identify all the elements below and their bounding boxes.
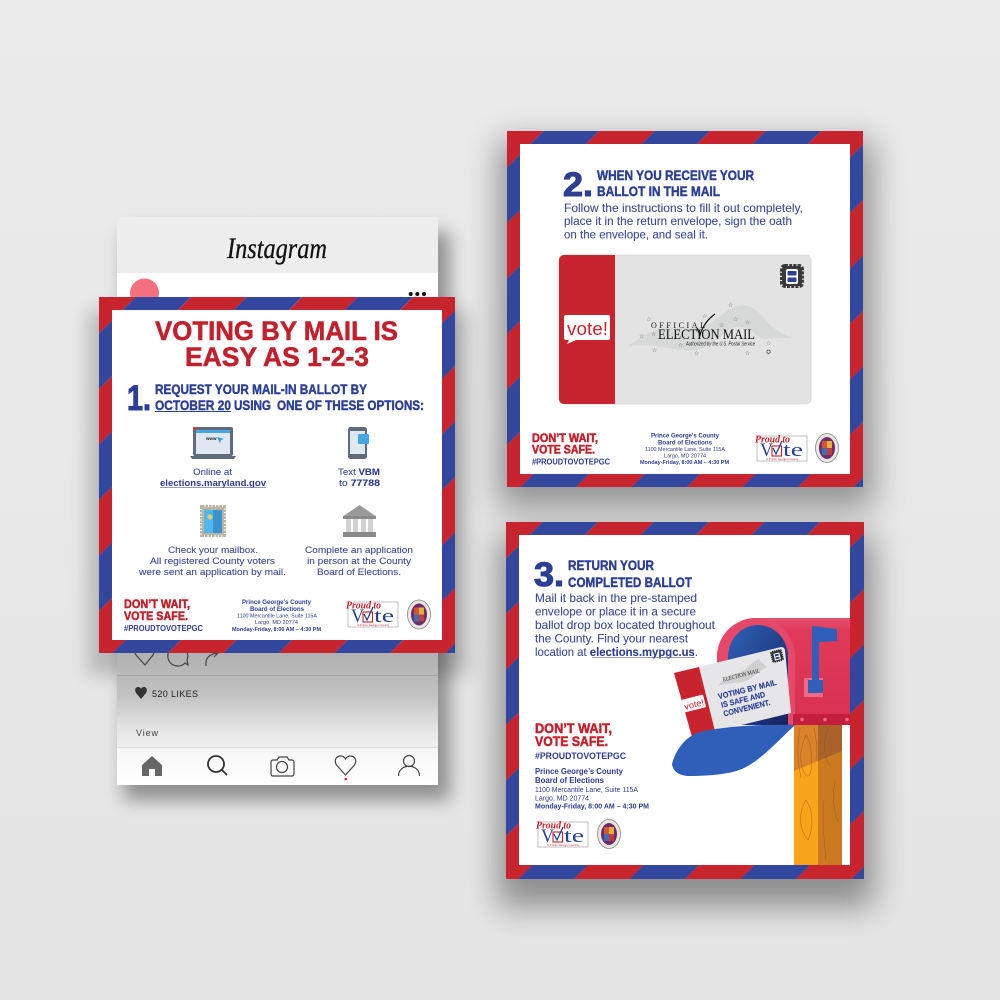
logo: proud to vote: Proud to [755, 434, 790, 446]
logo: county seal [816, 434, 838, 462]
option: mailbox [138, 545, 286, 578]
logo: proud to vote: V [541, 826, 554, 847]
mailbox illustration [672, 618, 850, 865]
icon: laptop: www [205, 436, 217, 441]
vote speech bubble: vote! [567, 319, 608, 339]
official election mail logo: ☆ [646, 316, 651, 323]
slogan: VOTE SAFE. [535, 734, 608, 749]
step 1 heading: ONE OF THESE OPTIONS: [277, 398, 424, 413]
vote mini logo: vote! [683, 697, 705, 712]
official election mail logo: ☆ [719, 322, 724, 329]
icon: government building [343, 505, 376, 537]
official election mail logo: ELECTION MAIL [658, 327, 755, 343]
mini stamp [771, 650, 783, 662]
icon: home [141, 756, 163, 776]
shadows behind panels [88, 140, 874, 907]
slogan: DON’T WAIT, [535, 721, 612, 736]
step 3 instructions [535, 591, 716, 659]
icon: heart [335, 756, 356, 775]
board of elections address: Monday-Friday, 8:00 AM – 4:30 PM [232, 627, 321, 633]
logo: proud to vote [346, 600, 398, 627]
title [155, 316, 398, 372]
logo: proud to vote: In Prince George’s County [357, 624, 390, 627]
option: in person: in person at the County [307, 556, 411, 567]
envelope message [717, 678, 782, 719]
panel: step 2 card [507, 131, 863, 487]
logo: proud to vote: te [374, 606, 394, 627]
official election mail logo: ☆ [702, 313, 707, 320]
slogan: #PROUDTOVOTEPGC [124, 624, 203, 633]
instagram header bar [117, 217, 438, 273]
bottom navigation bar [117, 748, 438, 785]
slogan: VOTE SAFE. [124, 611, 188, 623]
logo: county seal [408, 600, 430, 629]
panel: step 3 card [506, 522, 864, 879]
official election mail logo: ☆ [745, 350, 750, 357]
option: mailbox: All registered County voters [150, 556, 275, 567]
step 3 heading: COMPLETED BALLOT [568, 575, 693, 590]
logo: county seal [598, 820, 620, 848]
envelope message: VOTING BY MAIL [717, 678, 778, 701]
mailbox opening [728, 625, 788, 725]
wooden post [794, 725, 842, 865]
board of elections address: Largo, MD 20774 [535, 796, 589, 802]
mailbox flag [804, 626, 837, 697]
instagram logo wordmark: Instagram [226, 232, 327, 265]
board of elections address: Board of Elections [658, 440, 713, 446]
board of elections address: Prince George’s County [242, 599, 312, 606]
more options dots [409, 292, 426, 296]
official election mail logo: ☆ [745, 319, 750, 326]
slogan [124, 599, 203, 633]
logo: proud to vote: V [760, 440, 773, 461]
official election mail logo [628, 302, 794, 357]
instagram screen [117, 217, 438, 785]
step 2 instructions [564, 201, 803, 242]
mailbox body [717, 618, 850, 725]
mailbox front rim [717, 618, 795, 725]
step 3 instructions: the County. Find your nearest [535, 632, 689, 646]
slogan [532, 433, 610, 466]
logo: proud to vote: In Prince George’s County [547, 844, 580, 847]
icon: stamp [202, 507, 224, 535]
icon: camera [271, 757, 294, 776]
option: in person: Board of Elections. [317, 567, 401, 578]
slogan: DON’T WAIT, [124, 599, 190, 611]
board of elections address [535, 767, 649, 810]
step 2 instructions: Follow the instructions to fill it out completely, [564, 201, 803, 215]
slogan: DON’T WAIT, [532, 433, 598, 445]
option: online: elections.maryland.gov [160, 478, 267, 489]
official election mail logo: ☆ [694, 350, 699, 357]
official election mail logo: ☆ [733, 316, 738, 323]
view comments text: View [136, 728, 158, 738]
official election mail logo: ✪ [766, 349, 771, 356]
step 2 instructions: on the envelope, and seal it. [564, 228, 708, 242]
board of elections address [640, 432, 729, 466]
icon: phone [348, 427, 369, 459]
logo: proud to vote: te [783, 440, 803, 461]
board of elections address: Prince George’s County [535, 767, 624, 776]
step 1 heading: REQUEST YOUR MAIL-IN BALLOT BY [155, 382, 367, 397]
board of elections address: Largo, MD 20774 [664, 454, 706, 460]
option: online: Online at [193, 467, 232, 478]
official election mail logo: ☆ [766, 340, 771, 347]
envelope message: CONVENIENT. [722, 698, 771, 718]
official election mail logo: OFFICIAL [651, 321, 705, 330]
logo: proud to vote [755, 434, 807, 461]
option: mailbox: Check your mailbox. [168, 545, 258, 556]
option: text [338, 467, 380, 489]
vote speech bubble [564, 315, 610, 344]
post shaded area [117, 645, 438, 747]
option: text: to 77788 [339, 478, 380, 489]
official election mail logo: Authorized by the U.S. Postal Service [685, 342, 755, 348]
slogan: VOTE SAFE. [532, 444, 595, 456]
board of elections address: Board of Elections [535, 776, 605, 785]
official election mail envelope [559, 255, 811, 404]
logo: proud to vote: V [351, 606, 364, 627]
icon: search [208, 756, 227, 775]
icon: laptop [190, 427, 236, 459]
slogan: #PROUDTOVOTEPGC [535, 751, 626, 761]
logo: proud to vote: Proud to [536, 820, 571, 832]
option: text: Text VBM [338, 467, 380, 478]
slogan: #PROUDTOVOTEPGC [532, 458, 610, 466]
step 1 heading: OCTOBER 20 [155, 398, 231, 413]
step 2 heading: BALLOT IN THE MAIL [597, 184, 720, 199]
profile avatar [130, 278, 159, 308]
board of elections address: 1100 Mercantile Lane, Suite 115A [237, 614, 317, 620]
panel: step 1 card [99, 297, 455, 653]
board of elections address: 1100 Mercantile Lane, Suite 115A [535, 787, 638, 794]
official election mail logo: ☆ [651, 331, 656, 338]
step 3 instructions: Mail it back in the pre-stamped [535, 591, 697, 605]
board of elections address: Board of Elections [250, 606, 305, 613]
step 2 instructions: place it in the return envelope, sign the oath [564, 214, 792, 228]
board of elections address: Prince George’s County [651, 432, 720, 440]
board of elections address: 1100 Mercantile Lane, Suite 115A [645, 447, 725, 453]
step number 2: 2. [563, 166, 593, 204]
step 3 instructions: envelope or place it in a secure [535, 605, 696, 619]
title: EASY AS 1-2-3 [185, 342, 369, 372]
option: mailbox: were sent an application by mail. [138, 567, 286, 578]
board of elections address [232, 599, 321, 633]
step 3 instructions: location at elections.mypgc.us. [535, 645, 698, 659]
slogan [535, 721, 626, 761]
likes count [135, 687, 198, 699]
panel: instagram phone mockup [117, 217, 438, 785]
logo: proud to vote [536, 820, 588, 847]
step 3 heading: RETURN YOUR [568, 558, 654, 573]
step 3 heading [568, 558, 693, 590]
title: VOTING BY MAIL IS [155, 316, 398, 346]
step 2 heading: WHEN YOU RECEIVE YOUR [597, 168, 754, 183]
official election mail logo: ☆ [639, 333, 644, 340]
open mailbox door [672, 725, 795, 776]
step 1 heading: USING [234, 398, 271, 413]
option: in person: Complete an application [305, 545, 413, 556]
step number 1: 1. [127, 379, 151, 418]
mini election mail logo: ELECTION MAIL [722, 668, 761, 683]
step 3 instructions: ballot drop box located throughout [535, 618, 716, 632]
icon: profile [398, 756, 420, 776]
step 1 heading [155, 382, 424, 413]
board of elections address: Monday-Friday, 8:00 AM – 4:30 PM [640, 460, 729, 466]
official election mail logo: ☆ [728, 302, 733, 309]
step 2 heading [597, 168, 754, 199]
logo: proud to vote: In Prince George’s County [766, 458, 799, 461]
ballot envelope [674, 647, 791, 737]
logo: proud to vote: te [564, 826, 584, 847]
likes count: 520 LIKES [152, 689, 198, 699]
official election mail logo: ☆ [678, 342, 683, 349]
step number 3: 3. [534, 556, 564, 594]
board of elections address: Largo, MD 20774 [255, 620, 298, 626]
official election mail logo: ☆ [652, 347, 657, 354]
action icons [135, 646, 219, 666]
option: online [160, 467, 267, 489]
option: in person [305, 545, 413, 578]
envelope message: IS SAFE AND [720, 690, 766, 710]
postage stamp icon [782, 266, 802, 286]
logo: proud to vote: Proud to [346, 600, 381, 612]
mailbox bottom band [793, 714, 850, 725]
board of elections address: Monday-Friday, 8:00 AM – 4:30 PM [535, 804, 649, 810]
